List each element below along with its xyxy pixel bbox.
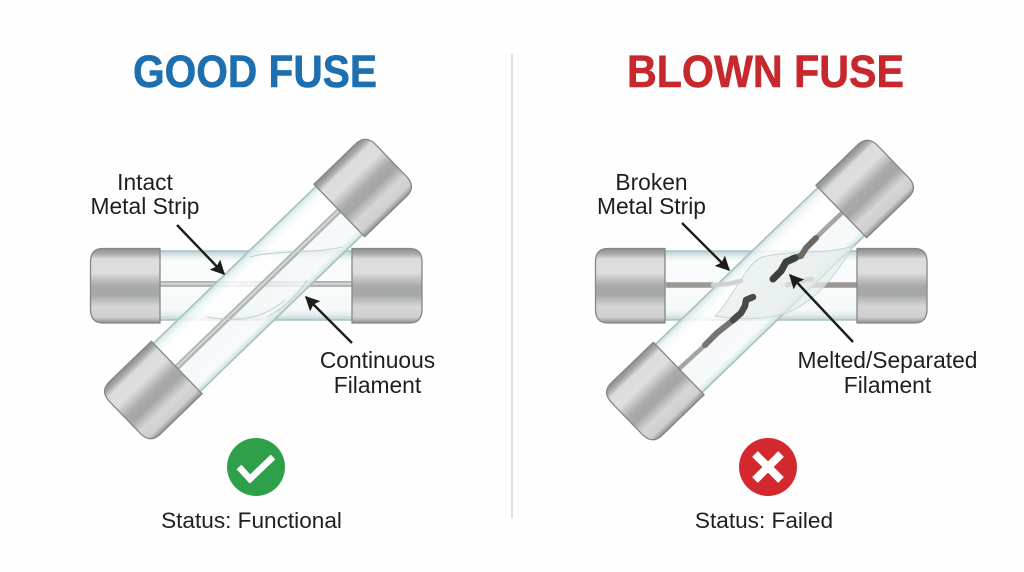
arrow: melted filament bbox=[790, 275, 853, 342]
label: continuous filament: Filament bbox=[334, 372, 422, 398]
inner glass swoop bbox=[207, 247, 343, 319]
melted residue bbox=[715, 246, 853, 319]
status: failed: Status: Failed bbox=[695, 508, 833, 533]
label: broken metal strip: Broken bbox=[615, 169, 688, 195]
diagonal fuse bbox=[100, 134, 416, 444]
icon: green check bbox=[227, 438, 285, 496]
illustration: blown fuse bbox=[596, 135, 927, 445]
illustration: good fuse bbox=[90, 134, 422, 444]
diagonal fuse caps bbox=[602, 135, 918, 445]
label: continuous filament: Continuous bbox=[320, 347, 435, 373]
title: blown fuse: BLOWN FUSE bbox=[627, 46, 904, 97]
label: intact metal strip: Intact bbox=[117, 169, 174, 195]
arrow: intact metal strip bbox=[177, 225, 224, 274]
diagonal fuse bbox=[652, 184, 868, 396]
horizontal fuse bbox=[596, 248, 927, 323]
title: good fuse: GOOD FUSE bbox=[133, 46, 377, 97]
label: broken metal strip: Metal Strip bbox=[597, 193, 706, 219]
label: intact metal strip: Metal Strip bbox=[91, 193, 199, 219]
label: melted filament: Melted/Separated bbox=[798, 347, 977, 373]
arrow: broken metal strip bbox=[682, 223, 729, 270]
broken filament bbox=[680, 210, 845, 368]
horizontal fuse bbox=[90, 248, 422, 323]
status: functional: Status: Functional bbox=[161, 508, 342, 533]
arrow: continuous filament bbox=[306, 297, 352, 343]
icon: red cross bbox=[739, 438, 797, 496]
label: melted filament: Filament bbox=[844, 372, 932, 398]
